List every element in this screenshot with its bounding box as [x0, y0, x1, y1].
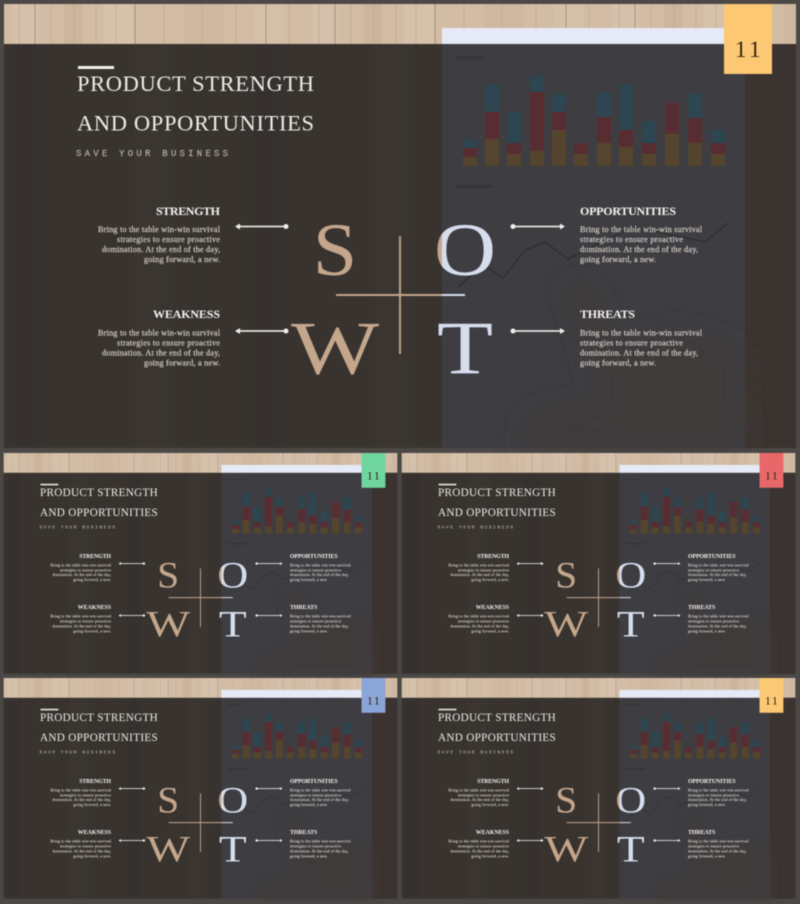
panel: green variant: PRODUCT STRENGTH: [40, 487, 158, 499]
panel: green variant: going forward, a new.: [73, 577, 111, 583]
panel: orange variant: going forward, a new.: [471, 802, 509, 808]
panel: green variant: strategies to ensure proactive: [60, 567, 111, 572]
panel: green variant: strategies to ensure proactive: [290, 567, 341, 572]
panel: red variant: strategies to ensure proactive: [688, 567, 739, 572]
panel: red variant: Bring to the table win-win survival: [688, 562, 749, 567]
panel: orange variant: going forward, a new.: [688, 802, 726, 808]
panel: green variant: W: [146, 605, 191, 646]
panel: orange variant: domination. At the end of the day,: [450, 849, 509, 855]
panel: red variant: O: [615, 556, 646, 597]
panel: red variant: Bring to the table win-win survival: [448, 614, 510, 619]
panel: blue variant: WEAKNESS: [78, 830, 112, 836]
panel: orange variant: SAVE YOUR BUSINESS: [437, 750, 513, 756]
panel: blue variant: Bring to the table win-win survival: [50, 839, 112, 844]
panel: green variant: strategies to ensure proactive: [290, 619, 341, 624]
threats block: strategies to ensure proactive: [580, 338, 683, 348]
panel: green variant: domination. At the end of the day,: [290, 572, 349, 578]
panel: orange variant: strategies to ensure proactive: [458, 844, 509, 849]
photo backdrop with wood strip, paper and stacked bar chart: [4, 4, 796, 448]
panel: orange variant: domination. At the end of the day,: [688, 849, 747, 855]
panel: green variant: OPPORTUNITIES: [290, 554, 338, 560]
panel: green variant: STRENGTH: [79, 554, 111, 560]
panel: blue variant: domination. At the end of the day,: [52, 797, 111, 803]
weakness block: Bring to the table win-win survival: [98, 328, 221, 338]
panel: red variant: going forward, a new.: [688, 629, 726, 635]
panel: red variant: SAVE YOUR BUSINESS: [437, 525, 513, 531]
strength block: Bring to the table win-win survival: [98, 225, 221, 234]
panel: red variant: domination. At the end of the day,: [450, 572, 509, 578]
panel: green variant: 11: [367, 470, 381, 482]
panel: orange variant: S: [555, 781, 577, 822]
panel: blue variant: O: [217, 781, 248, 822]
panel: red variant: W: [544, 605, 589, 646]
panel: main slide: [4, 4, 796, 448]
opportunities block: Bring to the table win-win survival: [580, 225, 703, 234]
opportunities block: OPPORTUNITIES: [580, 204, 676, 218]
panel: orange variant: Bring to the table win-win survival: [688, 787, 749, 792]
panel: blue variant: S: [157, 781, 179, 822]
page badge: [724, 4, 772, 74]
panel: blue variant: domination. At the end of the day,: [52, 849, 111, 855]
weakness block: domination. At the end of the day,: [102, 348, 220, 358]
panel: blue variant: Bring to the table win-win survival: [50, 787, 112, 792]
panel: orange variant: domination. At the end of the day,: [688, 797, 747, 803]
weakness block: WEAKNESS: [153, 307, 220, 321]
panel: blue variant: STRENGTH: [79, 779, 111, 785]
panel: red variant: [402, 453, 795, 674]
panel: blue variant: strategies to ensure proactive: [290, 844, 341, 849]
strength block: strategies to ensure proactive: [117, 235, 220, 244]
panel: orange variant: THREATS: [688, 830, 716, 836]
panel: green variant: domination. At the end of the day,: [52, 572, 111, 578]
panel: blue variant: AND OPPORTUNITIES: [40, 732, 158, 744]
title: [77, 71, 314, 136]
panel: green variant: T: [219, 604, 247, 645]
panel: red variant: 11: [765, 470, 779, 482]
SWOT letters and cross: W: [291, 308, 379, 390]
panel: red variant: STRENGTH: [477, 554, 509, 560]
heading accent bar: [78, 66, 114, 69]
panel: red variant: going forward, a new.: [688, 577, 726, 583]
opportunities block: going forward, a new.: [580, 255, 656, 264]
panel: blue variant: THREATS: [290, 830, 318, 836]
weakness block: strategies to ensure proactive: [117, 338, 220, 348]
panel: green variant: SAVE YOUR BUSINESS: [39, 525, 115, 531]
panel: red variant: Bring to the table win-win survival: [688, 614, 749, 619]
SWOT letters and cross: T: [437, 307, 493, 390]
panel: red variant: going forward, a new.: [471, 629, 509, 635]
panel: red variant: Bring to the table win-win survival: [448, 562, 510, 567]
panel: blue variant: strategies to ensure proactive: [60, 792, 111, 797]
panel: red variant: strategies to ensure proactive: [458, 619, 509, 624]
weakness block: [98, 307, 221, 368]
panel: orange variant: WEAKNESS: [476, 830, 510, 836]
panel: red variant: OPPORTUNITIES: [688, 554, 736, 560]
threats block: going forward, a new.: [580, 358, 656, 368]
panel: green variant: WEAKNESS: [78, 605, 112, 611]
threats block: THREATS: [580, 307, 635, 321]
SWOT letters and cross: [291, 209, 496, 390]
panel: red variant: S: [555, 556, 577, 597]
SWOT letters and cross: O: [434, 209, 496, 292]
panel: blue variant: OPPORTUNITIES: [290, 779, 338, 785]
panel: green variant: THREATS: [290, 605, 318, 611]
panel: green variant: AND OPPORTUNITIES: [40, 507, 158, 519]
threats block: Bring to the table win-win survival: [580, 328, 703, 338]
panel: orange variant: going forward, a new.: [688, 854, 726, 860]
panel: blue variant: going forward, a new.: [290, 802, 328, 808]
panel: red variant: T: [617, 604, 645, 645]
weakness block: going forward, a new.: [144, 358, 220, 368]
panel: green variant: domination. At the end of the day,: [290, 624, 349, 630]
panel: green variant: Bring to the table win-win survival: [290, 562, 351, 567]
panel: blue variant: [4, 678, 397, 899]
panel: orange variant: strategies to ensure proactive: [458, 792, 509, 797]
panel: blue variant: going forward, a new.: [73, 802, 111, 808]
title: AND OPPORTUNITIES: [77, 110, 314, 136]
panel: red variant: domination. At the end of the day,: [688, 624, 747, 630]
panel: red variant: AND OPPORTUNITIES: [438, 507, 556, 519]
panel: orange variant: OPPORTUNITIES: [688, 779, 736, 785]
panel: red variant: PRODUCT STRENGTH: [438, 487, 556, 499]
panel: green variant: strategies to ensure proactive: [60, 619, 111, 624]
panel: blue variant: going forward, a new.: [290, 854, 328, 860]
panel: blue variant: Bring to the table win-win survival: [290, 787, 351, 792]
panel: blue variant: SAVE YOUR BUSINESS: [39, 750, 115, 756]
panel: orange variant: [402, 678, 795, 899]
panel: orange variant: 11: [765, 695, 779, 707]
panel: blue variant: Bring to the table win-win survival: [290, 839, 351, 844]
panel: green variant: going forward, a new.: [290, 577, 328, 583]
panel: orange variant: Bring to the table win-win survival: [448, 787, 510, 792]
opportunities block: domination. At the end of the day,: [580, 245, 698, 254]
panel: blue variant: PRODUCT STRENGTH: [40, 712, 158, 724]
panel: blue variant: going forward, a new.: [73, 854, 111, 860]
opportunities block: strategies to ensure proactive: [580, 235, 683, 244]
threats block: domination. At the end of the day,: [580, 348, 698, 358]
panel: blue variant: W: [146, 830, 191, 871]
threats block: [580, 307, 703, 368]
panel: blue variant: 11: [367, 695, 381, 707]
panel: red variant: strategies to ensure proactive: [458, 567, 509, 572]
strength block: STRENGTH: [156, 204, 221, 218]
panel: orange variant: strategies to ensure proactive: [688, 792, 739, 797]
panel: orange variant: Bring to the table win-win survival: [448, 839, 510, 844]
SWOT letters and cross: S: [313, 209, 357, 292]
panel: green variant: going forward, a new.: [290, 629, 328, 635]
panel: red variant: WEAKNESS: [476, 605, 510, 611]
panel: blue variant: T: [219, 829, 247, 870]
panel: red variant: domination. At the end of the day,: [450, 624, 509, 630]
panel: orange variant: strategies to ensure proactive: [688, 844, 739, 849]
panel: blue variant: domination. At the end of the day,: [290, 797, 349, 803]
panel: orange variant: Bring to the table win-win survival: [688, 839, 749, 844]
panel: green variant: [4, 453, 397, 674]
panel: green variant: Bring to the table win-win survival: [50, 614, 112, 619]
panel: orange variant: AND OPPORTUNITIES: [438, 732, 556, 744]
opportunities block: [580, 204, 703, 264]
panel: green variant: domination. At the end of the day,: [52, 624, 111, 630]
panel: blue variant: strategies to ensure proactive: [60, 844, 111, 849]
panel: green variant: going forward, a new.: [73, 629, 111, 635]
panel: green variant: Bring to the table win-win survival: [50, 562, 112, 567]
title: PRODUCT STRENGTH: [77, 71, 314, 96]
panel: blue variant: domination. At the end of the day,: [290, 849, 349, 855]
panel: orange variant: domination. At the end of the day,: [450, 797, 509, 803]
panel: orange variant: STRENGTH: [477, 779, 509, 785]
strength block: domination. At the end of the day,: [102, 245, 220, 254]
panel: orange variant: W: [544, 830, 589, 871]
panel: red variant: going forward, a new.: [471, 577, 509, 583]
panel: blue variant: strategies to ensure proactive: [290, 792, 341, 797]
strength block: [98, 204, 221, 264]
panel: orange variant: T: [617, 829, 645, 870]
panel: orange variant: O: [615, 781, 646, 822]
strength block: going forward, a new.: [144, 255, 220, 264]
connector arrows: [235, 224, 565, 334]
panel: green variant: O: [217, 556, 248, 597]
panel: red variant: THREATS: [688, 605, 716, 611]
panel: orange variant: PRODUCT STRENGTH: [438, 712, 556, 724]
subtitle: SAVE YOUR BUSINESS: [76, 149, 228, 159]
page badge: 11: [735, 37, 764, 62]
panel: green variant: Bring to the table win-win survival: [290, 614, 351, 619]
panel: orange variant: going forward, a new.: [471, 854, 509, 860]
panel: green variant: S: [157, 556, 179, 597]
panel: red variant: domination. At the end of the day,: [688, 572, 747, 578]
panel: red variant: strategies to ensure proactive: [688, 619, 739, 624]
